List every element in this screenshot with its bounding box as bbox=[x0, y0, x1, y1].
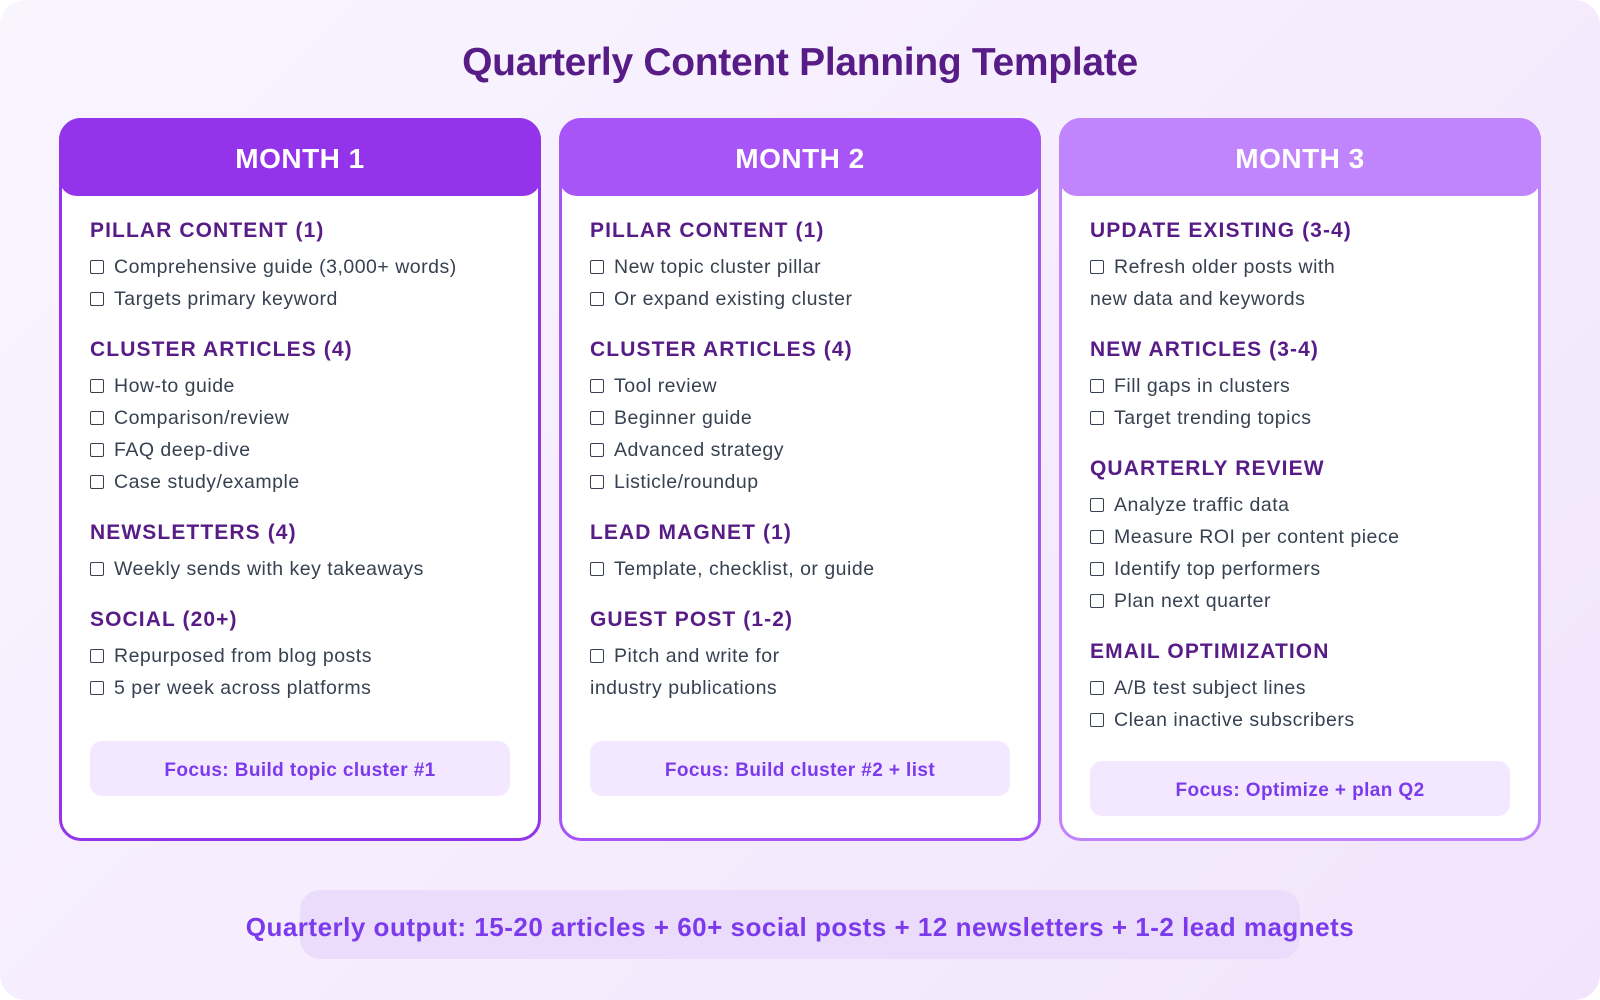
checklist: month 1: Case study/example bbox=[114, 471, 300, 493]
checklist: month 3 bbox=[1090, 219, 1399, 731]
panel: month 1 bbox=[59, 118, 541, 841]
checklist: month 2: Advanced strategy bbox=[614, 439, 784, 461]
checklist: month 3: A/B test subject lines bbox=[1114, 677, 1306, 699]
checklist: month 1: 5 per week across platforms bbox=[114, 677, 371, 699]
checklist: month 3: EMAIL OPTIMIZATION bbox=[1090, 640, 1330, 663]
checklist: month 3: Analyze traffic data bbox=[1114, 494, 1289, 516]
checklist: month 3: NEW ARTICLES (3-4) bbox=[1090, 338, 1319, 361]
checklist: month 2: Tool review bbox=[614, 375, 717, 397]
header: month 1: MONTH 1 bbox=[235, 143, 365, 174]
checklist: month 3: new data and keywords bbox=[1090, 288, 1305, 310]
checklist: month 1: Targets primary keyword bbox=[114, 288, 338, 310]
checklist: month 3: Plan next quarter bbox=[1114, 590, 1271, 612]
checklist: month 3: Fill gaps in clusters bbox=[1114, 375, 1290, 397]
header: month 3: MONTH 3 bbox=[1235, 143, 1365, 174]
checklist: month 2: Or expand existing cluster bbox=[614, 288, 852, 310]
checklist: month 2: Pitch and write for bbox=[614, 645, 780, 667]
checklist: month 1: PILLAR CONTENT (1) bbox=[90, 219, 324, 242]
checklist: month 1: CLUSTER ARTICLES (4) bbox=[90, 338, 353, 361]
checklist: month 2: Template, checklist, or guide bbox=[614, 558, 875, 580]
focus box: month 1: Focus: Build topic cluster #1 bbox=[164, 760, 436, 781]
header: month 1 bbox=[59, 118, 541, 196]
header: month 2 bbox=[559, 118, 1041, 196]
checklist: month 1: Weekly sends with key takeaways bbox=[114, 558, 424, 580]
focus box: month 2: Focus: Build cluster #2 + list bbox=[665, 760, 935, 781]
checklist: month 1: FAQ deep-dive bbox=[114, 439, 251, 461]
checklist: month 3: Identify top performers bbox=[1114, 558, 1321, 580]
checklist: month 2: Listicle/roundup bbox=[614, 471, 759, 493]
checklist: month 3: QUARTERLY REVIEW bbox=[1090, 457, 1325, 480]
checklist: month 1: SOCIAL (20+) bbox=[90, 608, 238, 631]
checklist: month 2: CLUSTER ARTICLES (4) bbox=[590, 338, 853, 361]
checklist: month 2: industry publications bbox=[590, 677, 777, 699]
title: Quarterly Content Planning Template bbox=[462, 41, 1138, 84]
checklist: month 2: GUEST POST (1-2) bbox=[590, 608, 793, 631]
focus box: month 2 bbox=[590, 741, 1010, 796]
checklist: month 1: Comprehensive guide (3,000+ words) bbox=[114, 256, 457, 278]
checklist: month 1 bbox=[90, 219, 457, 699]
checklist: month 2 bbox=[590, 219, 875, 699]
checklist: month 3: Target trending topics bbox=[1114, 407, 1311, 429]
checklist: month 1: Repurposed from blog posts bbox=[114, 645, 372, 667]
panel: month 3 bbox=[1059, 118, 1541, 841]
checklist: month 3: Measure ROI per content piece bbox=[1114, 526, 1399, 548]
summary text: Quarterly output: 15-20 articles + 60+ social posts + 12 newsletters + 1-2 lead magnets bbox=[246, 912, 1354, 942]
checklist: month 1: NEWSLETTERS (4) bbox=[90, 521, 297, 544]
checklist: month 1: How-to guide bbox=[114, 375, 235, 397]
checklist: month 2: PILLAR CONTENT (1) bbox=[590, 219, 824, 242]
panel: month 2 bbox=[559, 118, 1041, 841]
checklist: month 2: New topic cluster pillar bbox=[614, 256, 821, 278]
checklist: month 3: Clean inactive subscribers bbox=[1114, 709, 1355, 731]
header: month 2: MONTH 2 bbox=[735, 143, 865, 174]
checklist: month 2: LEAD MAGNET (1) bbox=[590, 521, 792, 544]
header: month 3 bbox=[1059, 118, 1541, 196]
checklist: month 2: Beginner guide bbox=[614, 407, 752, 429]
focus box: month 3 bbox=[1090, 761, 1510, 816]
checklist: month 1: Comparison/review bbox=[114, 407, 289, 429]
focus box: month 1 bbox=[90, 741, 510, 796]
focus box: month 3: Focus: Optimize + plan Q2 bbox=[1175, 780, 1425, 801]
summary banner bbox=[300, 890, 1300, 959]
checklist: month 3: UPDATE EXISTING (3-4) bbox=[1090, 219, 1352, 242]
checklist: month 3: Refresh older posts with bbox=[1114, 256, 1335, 278]
